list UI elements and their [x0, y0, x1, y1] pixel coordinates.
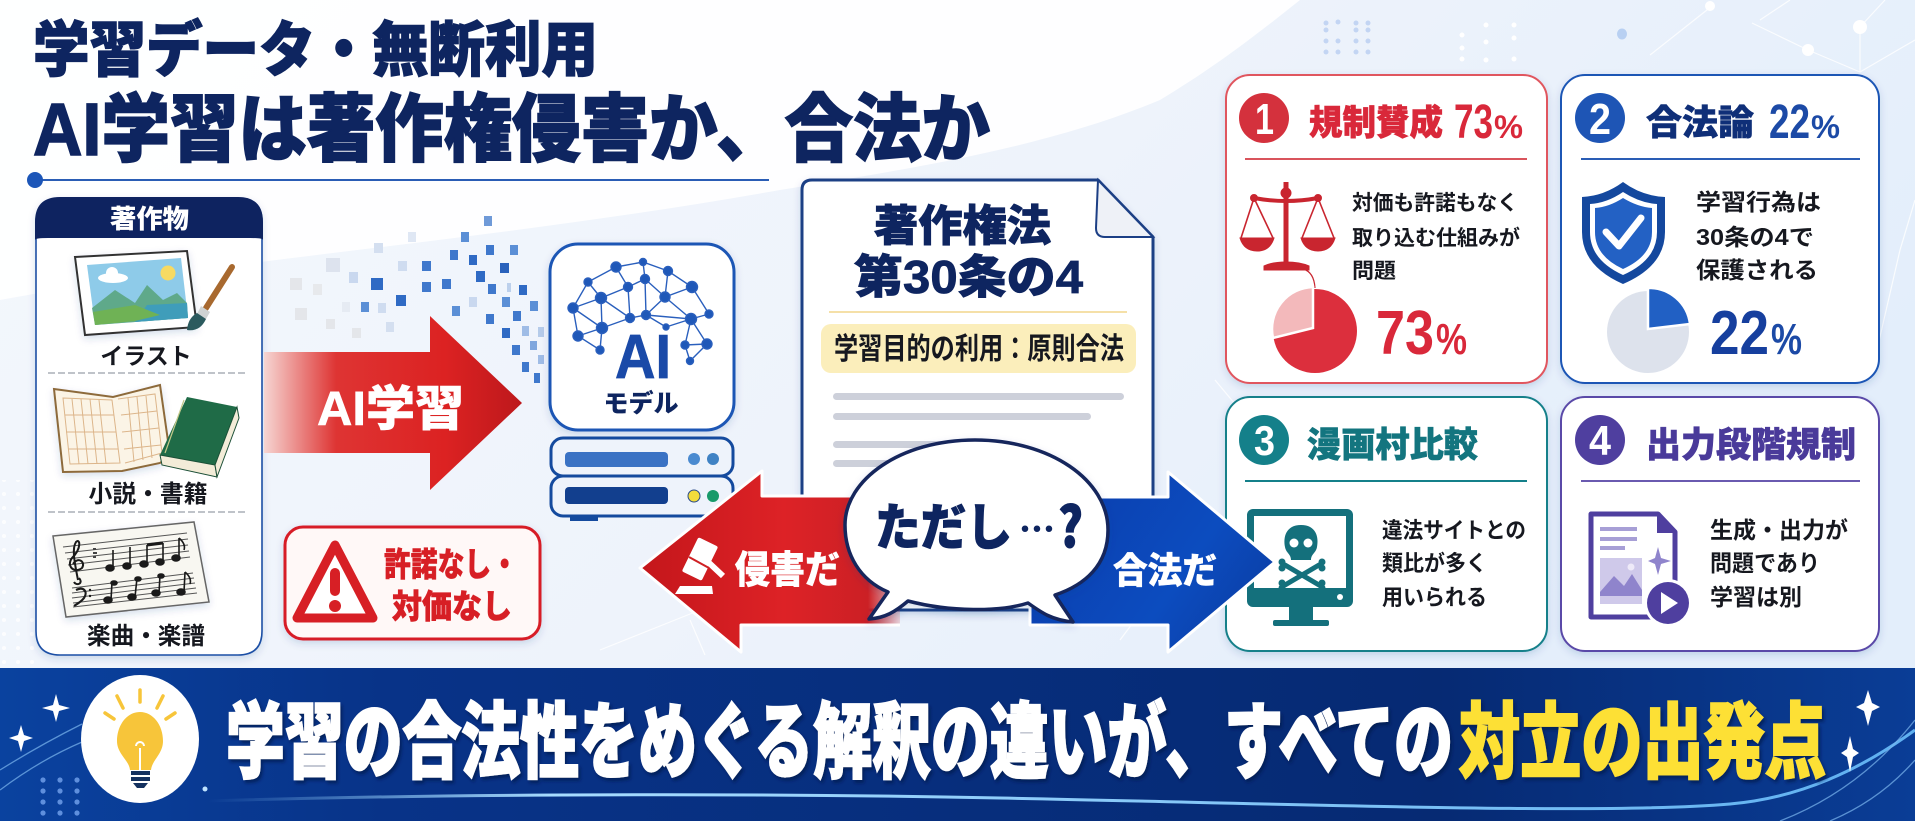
body text — [1352, 192, 1520, 283]
callout: no permission no payment: 対価なし — [392, 588, 512, 625]
title line 2: AI学習は著作権侵害か、合法か — [33, 88, 990, 171]
body text — [1710, 517, 1848, 610]
number badge 4 — [1575, 415, 1625, 465]
panel header: 著作物 — [110, 204, 189, 234]
decorative sparkle and wave lines — [0, 690, 1915, 821]
number badge 2 — [1575, 93, 1625, 144]
data particles — [290, 216, 544, 383]
icon: generated document — [1591, 513, 1692, 627]
banner message: 対立の出発点 — [1459, 697, 1826, 789]
card 4: output stage regulation — [1561, 397, 1879, 651]
title rule — [27, 172, 769, 188]
icon: warning — [297, 545, 373, 618]
body text: 学習は別 — [1710, 584, 1802, 610]
body text: 対価も許諾もなく — [1352, 192, 1518, 215]
number badge 2: 2 — [1589, 95, 1611, 144]
icon: illustration — [75, 251, 232, 335]
bubble text: ? — [1058, 483, 1083, 564]
body text — [1382, 518, 1526, 610]
document fold — [1096, 180, 1153, 237]
label: illustration: イラスト — [100, 343, 192, 369]
AI model and server — [550, 244, 734, 521]
bubble text — [875, 483, 1083, 564]
pie chart 73% — [1272, 287, 1357, 373]
number badge 1: 1 — [1255, 95, 1274, 144]
body text: 問題であり — [1710, 550, 1820, 576]
number badge 1 — [1239, 93, 1289, 144]
number badge 4: 4 — [1589, 417, 1612, 464]
icon: scales — [1240, 182, 1335, 288]
panel: works — [35, 197, 263, 655]
value 73%: 73 — [1376, 299, 1434, 368]
body text: 類比が多く — [1382, 551, 1487, 576]
document heading: 著作権法 — [874, 203, 1051, 251]
arrow: AI learning: AI学習 — [317, 383, 464, 436]
callout: no permission no payment — [285, 527, 540, 639]
highlight: learning use is legal in principle: 学習目的の利用：原則合法 — [834, 333, 1124, 366]
icon: light bulb — [81, 675, 199, 803]
conclusion banner — [0, 668, 1915, 821]
body text: 保護される — [1696, 257, 1818, 283]
callout: no permission no payment: 許諾なし・ — [384, 546, 518, 583]
document heading: 第30条の4 — [854, 251, 1083, 303]
bubble text: ただし — [875, 488, 1012, 560]
body text: 生成・出力が — [1710, 517, 1848, 543]
value 73%: % — [1436, 315, 1467, 364]
heading: % — [1494, 109, 1523, 145]
icon: sheet music — [53, 522, 209, 617]
AI model box: モデル — [603, 389, 679, 418]
arrow: AI learning — [264, 316, 522, 490]
arrow: infringement: 侵害だ — [735, 550, 840, 592]
panel header — [35, 197, 263, 240]
title line 1: 学習データ・無断利用 — [33, 17, 598, 84]
value 22%: % — [1771, 315, 1802, 364]
heading: 規制賛成 — [1309, 103, 1443, 143]
heading: % — [1811, 109, 1840, 145]
number badge 3 — [1239, 415, 1289, 465]
arrow: infringement — [640, 471, 900, 652]
highlight: learning use is legal in principle — [821, 324, 1136, 373]
AI model box — [550, 244, 734, 430]
heading: 合法論 — [1646, 104, 1754, 143]
body text: 用いられる — [1382, 585, 1487, 610]
heading — [1309, 96, 1523, 149]
pie chart 22% — [1607, 288, 1690, 373]
value 22%: 22 — [1710, 299, 1769, 368]
title — [27, 17, 990, 188]
heading: 73 — [1454, 96, 1493, 149]
bubble text: … — [1019, 501, 1055, 553]
card 3: Mangamura comparison — [1226, 397, 1547, 651]
arrow: legal — [1030, 472, 1275, 652]
arrow: legal: 合法だ — [1113, 550, 1217, 591]
number badge 3: 3 — [1254, 417, 1275, 464]
heading: 出力段階規制 — [1646, 426, 1856, 465]
body text — [1696, 189, 1821, 283]
icon: monitor with skull — [1247, 509, 1353, 626]
heading: 22 — [1769, 96, 1810, 149]
banner message: 学習の合法性をめぐる解釈の違いが、すべての — [226, 696, 1453, 789]
body text: 問題 — [1352, 260, 1396, 283]
body text: 学習行為は — [1696, 189, 1821, 215]
icon: neural network brain — [568, 258, 713, 364]
AI model box: AI — [615, 323, 671, 392]
heading — [1646, 96, 1840, 149]
icon: gavel — [675, 537, 723, 594]
icon: shield — [1582, 182, 1665, 284]
label: books: 小説・書籍 — [88, 481, 208, 508]
body text: 30条の4で — [1696, 224, 1814, 250]
icon: open book and green book — [54, 385, 239, 477]
document heading — [854, 203, 1083, 303]
body text: 取り込む仕組みが — [1352, 226, 1520, 250]
server rack — [551, 438, 733, 521]
card 1: pro regulation — [1226, 75, 1547, 383]
body text: 違法サイトとの — [1382, 518, 1526, 543]
card 2: legal theory — [1561, 75, 1879, 383]
heading: 漫画村比較 — [1307, 426, 1478, 465]
speech bubble — [845, 440, 1108, 622]
panel: copyright law document — [802, 180, 1153, 610]
label: music: 楽曲・楽譜 — [87, 623, 205, 650]
